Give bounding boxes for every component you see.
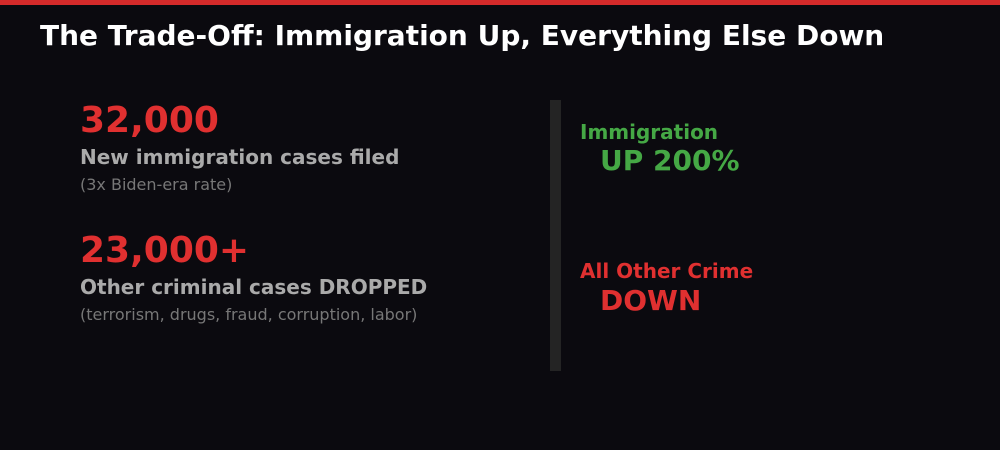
value: UP 200% [600, 144, 740, 177]
immigration up callout [580, 120, 740, 177]
vertical divider bar [550, 100, 561, 371]
sublabel: (3x Biden-era rate) [80, 175, 232, 194]
heading: Immigration [580, 120, 718, 144]
value: DOWN [600, 284, 701, 317]
top accent bar [0, 0, 1000, 5]
sublabel: (terrorism, drugs, fraud, corruption, labor) [80, 305, 417, 324]
stat block: dropped cases [80, 230, 427, 324]
number: 23,000+: 23,000+ [80, 230, 249, 271]
title: The Trade-Off: Immigration Up, Everything Else Down [40, 19, 884, 52]
label: Other criminal cases DROPPED [80, 275, 427, 299]
label: New immigration cases filed [80, 145, 399, 169]
stat block: immigration cases [80, 100, 399, 194]
other crime down callout [580, 259, 753, 317]
number: 32,000: 32,000 [80, 100, 219, 141]
heading: All Other Crime [580, 259, 753, 283]
